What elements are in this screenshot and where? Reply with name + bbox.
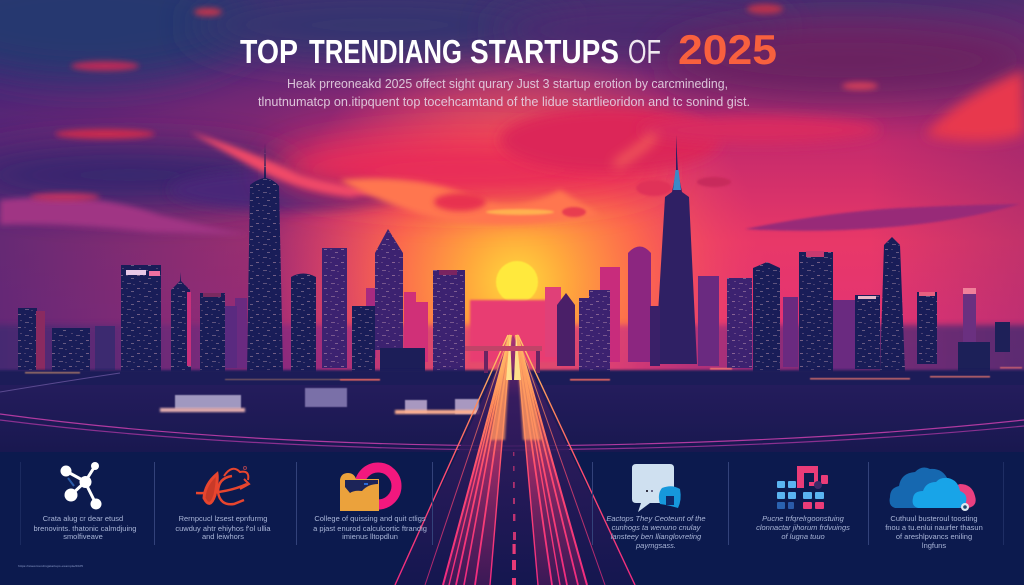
column 5 text: clonnactar jihorum frdvuings <box>756 523 850 532</box>
column 5 text <box>756 514 850 541</box>
column 2 text <box>175 514 271 541</box>
water <box>0 385 1024 455</box>
column 6 text: lngfuns <box>922 541 946 550</box>
column 6 text: of areshlpvancs eniling <box>896 532 972 541</box>
column 5 text: of lugna tuuo <box>781 532 825 541</box>
city skyline buildings <box>18 135 1010 378</box>
shore road trail <box>0 373 120 392</box>
sunset clouds <box>0 0 1024 235</box>
column 2: orange swoosh icon <box>196 466 249 504</box>
sun <box>496 261 538 303</box>
subtitle: Heak prreoneakd 2025 offect sight qurary Just 3 startup erotion by carcmineding, <box>287 76 728 91</box>
column 3: folder and ring icon <box>340 468 396 511</box>
column 3 text: a pjast enurod calculcortic ftrandig <box>313 524 427 533</box>
column 4 text <box>606 514 706 550</box>
column 2 text: cuwduy ahtr ehiyhos f'ol ullia <box>175 524 271 533</box>
column 5: pixel grid icon <box>777 466 828 509</box>
subtitle <box>258 76 750 109</box>
left waterfront buildings <box>160 388 480 414</box>
column 1 text <box>34 514 136 541</box>
column 2 text: Rernpcucl lzsest epnfurmg <box>179 514 267 523</box>
column 6 text: Cuthuul busteroul toosting <box>890 514 978 523</box>
title: STARTUPS <box>470 33 619 70</box>
column 1 text: brenovints. thatonic calmdjuing <box>34 524 136 533</box>
column 3 text <box>313 514 427 541</box>
column 4: chat bubble icon <box>632 464 681 512</box>
sky background <box>0 0 1024 390</box>
column 6: cloud icon <box>890 468 976 511</box>
title: OF <box>628 33 661 70</box>
column 3 text: imienus lltopdlun <box>342 532 398 541</box>
column dividers <box>20 462 1004 545</box>
column 1 text: smolfiveave <box>63 532 103 541</box>
column 6 text <box>885 514 983 550</box>
title: 2025 <box>678 26 777 73</box>
column 5 text: Pucne trfqrelrgoonstuing <box>762 514 845 523</box>
title <box>240 26 777 73</box>
column 2 text: and leiwhors <box>202 532 244 541</box>
ring road light trails <box>0 414 1024 450</box>
highway with light trails <box>395 335 635 585</box>
column 4 text: cunhogs ta wenuno cnulay <box>612 523 702 532</box>
bottom panel <box>0 452 1024 585</box>
column 6 text: fnou a tu.enlui naurfer thasun <box>885 523 983 532</box>
subtitle: tlnutnumatcp on.itipquent top tocehcamtand of the lidue startlieoridon and tc sonind gist. <box>258 94 750 109</box>
title: TRENDIANG <box>309 33 462 70</box>
column 1: network icon <box>60 462 102 510</box>
column 4 text: paymgsass. <box>635 541 676 550</box>
column 4 text: Eactops They Ceoteunt of the <box>606 514 706 523</box>
column 4 text: lansteey ben llianglovreting <box>611 532 702 541</box>
column 1 text: Crata alug cr dear etusd <box>43 514 123 523</box>
footnote: https://www.trendingstartups.example/2025 <box>18 564 83 568</box>
title: TOP <box>240 33 298 70</box>
column 3 text: College of quissing and quit ctligs <box>314 514 426 523</box>
shoreline with city lights <box>0 367 1024 388</box>
distant hazy skyline <box>0 267 1024 375</box>
overpass bridge <box>465 346 542 373</box>
